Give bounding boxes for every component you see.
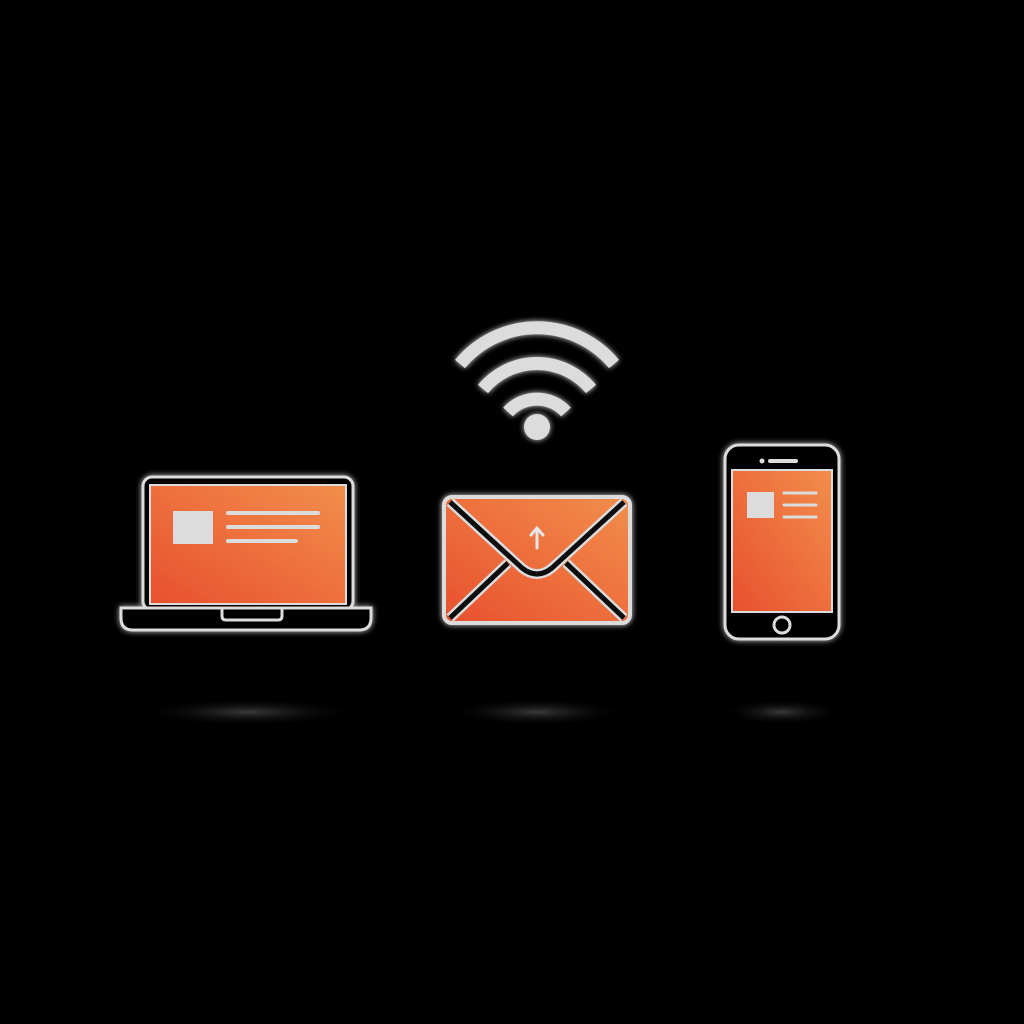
shadow: laptop: [138, 698, 358, 726]
shadow: envelope: [447, 698, 627, 726]
icon: wifi: [460, 328, 614, 440]
shadow: phone: [722, 699, 842, 725]
icon: envelope: [444, 497, 630, 623]
icon: laptop: [121, 477, 371, 630]
icon: phone: [725, 445, 839, 639]
